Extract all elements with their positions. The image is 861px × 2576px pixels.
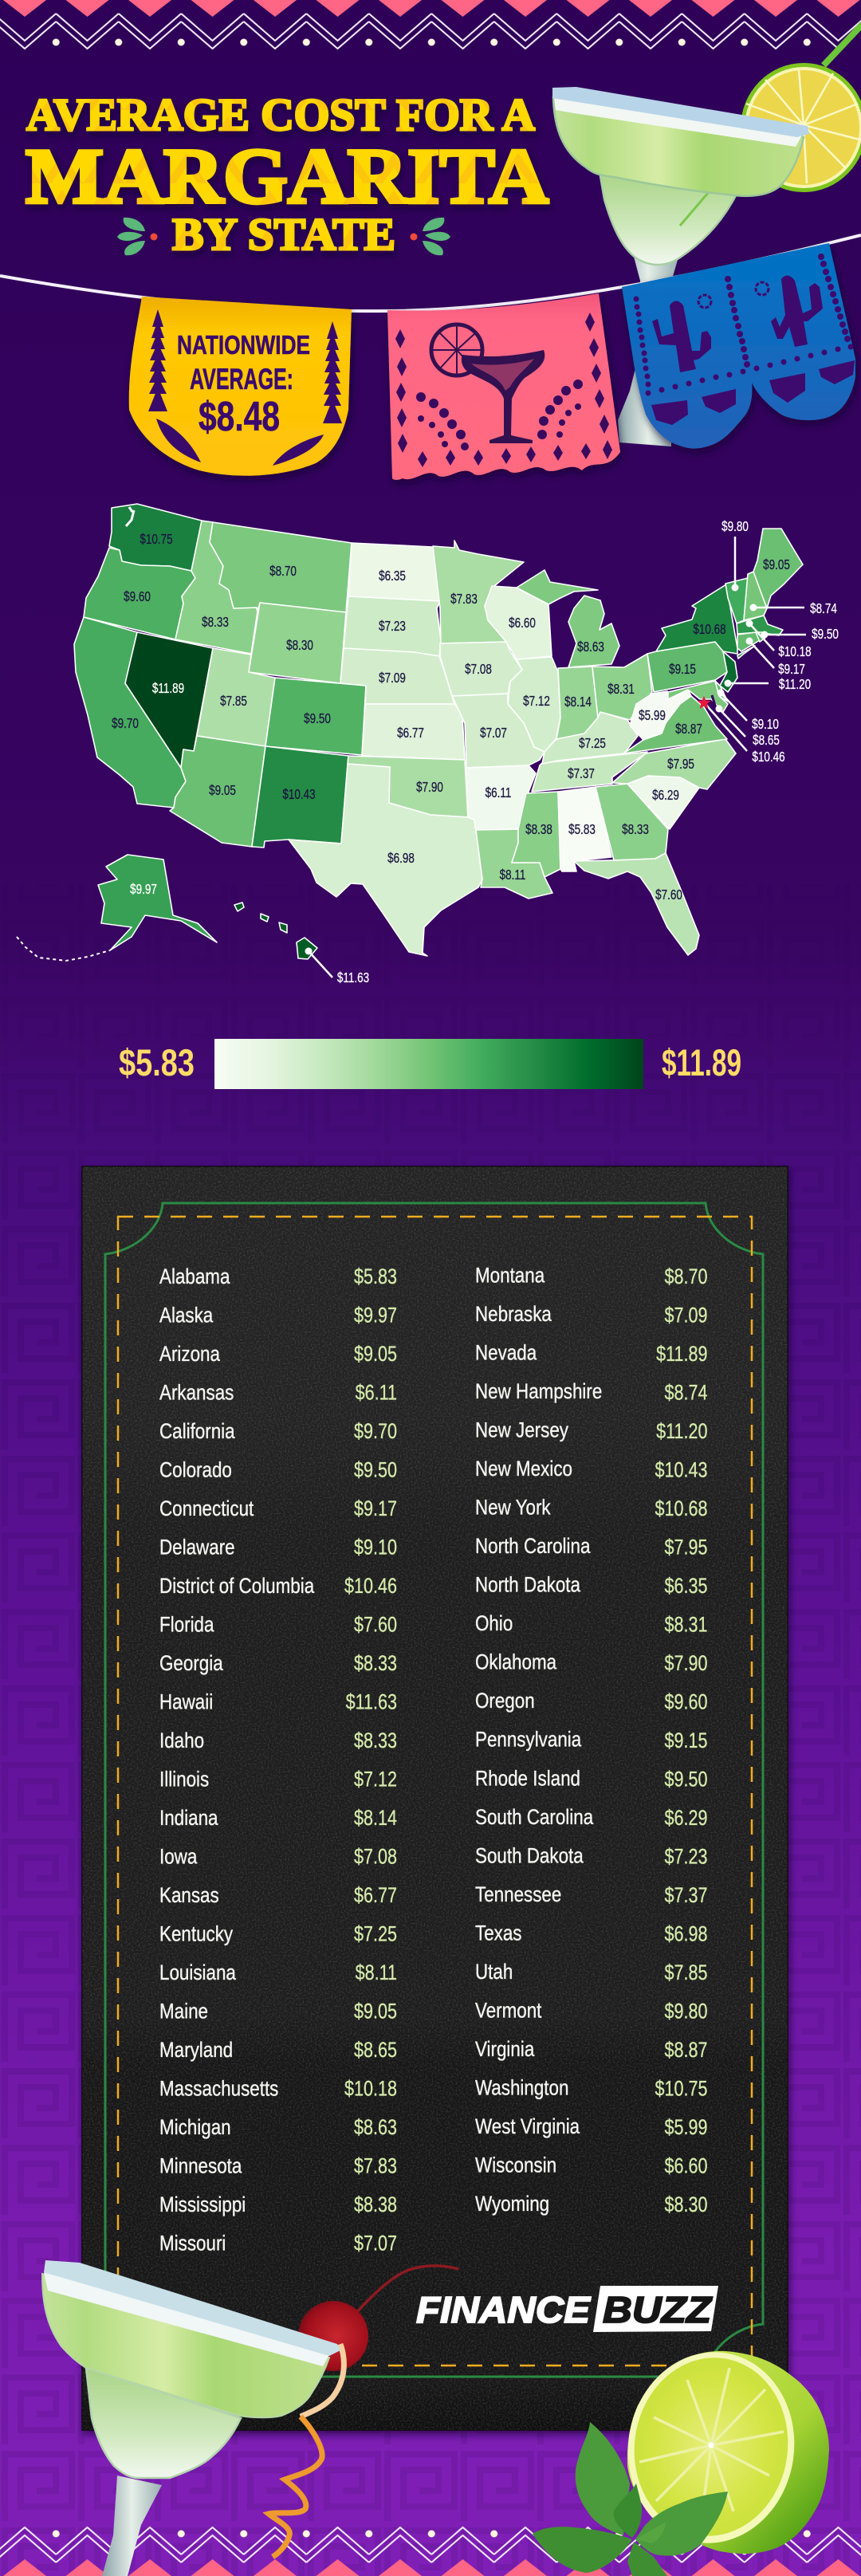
left column state names: District of Columbia — [159, 1575, 314, 1599]
North Dakota — [348, 543, 440, 601]
green frame — [105, 1203, 763, 2377]
map value labels: $8.31 — [607, 682, 635, 698]
map value labels: $7.90 — [416, 780, 443, 796]
legend gradient bar — [214, 1039, 643, 1089]
map value labels: $7.08 — [465, 662, 492, 678]
map value labels: $9.97 — [130, 882, 157, 898]
Minnesota — [433, 541, 524, 643]
map value labels: $8.38 — [525, 822, 552, 838]
map value labels: $9.15 — [669, 662, 696, 678]
right column prices: $11.89 — [656, 1343, 708, 1367]
right column state names: Oregon — [475, 1689, 535, 1713]
Alaska — [98, 855, 217, 950]
left column prices: $7.83 — [354, 2154, 397, 2178]
icon: cherry — [298, 2266, 458, 2371]
left column state names: Iowa — [159, 1846, 197, 1869]
Kansas — [362, 704, 465, 760]
top border pattern — [0, 0, 861, 56]
Illinois — [508, 657, 560, 752]
left column state names: Kentucky — [159, 1923, 234, 1946]
map value labels: $8.14 — [564, 694, 592, 710]
flag dots and diamonds — [395, 313, 612, 467]
West Virginia — [630, 690, 691, 740]
map value labels: $8.33 — [202, 615, 229, 631]
right column prices: $8.31 — [664, 1613, 708, 1637]
right column state names: Oklahoma — [475, 1651, 556, 1674]
bunting string — [0, 235, 861, 311]
Long Island — [737, 646, 755, 659]
map value labels: $9.50 — [304, 711, 331, 727]
bottom border pattern — [0, 2520, 861, 2576]
Massachusetts — [737, 615, 783, 635]
right column prices: $6.29 — [664, 1807, 708, 1831]
panel: state price table — [82, 1166, 788, 2430]
right column state names: Washington — [475, 2077, 568, 2100]
map value labels: $9.17 — [778, 662, 805, 678]
Missouri — [452, 694, 545, 768]
right column state names: Texas — [475, 1921, 522, 1945]
left column prices: $6.77 — [354, 1884, 397, 1908]
Vermont — [725, 578, 748, 623]
states — [74, 504, 803, 959]
map value labels: $9.80 — [721, 519, 749, 535]
left column state names: Michigan — [159, 2116, 231, 2140]
left column prices — [344, 1265, 397, 2255]
left column prices: $8.11 — [356, 1961, 397, 1985]
left column state names: Indiana — [159, 1807, 218, 1831]
left column prices: $8.14 — [354, 1807, 397, 1831]
icon: lime half — [615, 2342, 829, 2554]
right column state names: Nevada — [475, 1342, 537, 1365]
left column prices: $7.08 — [354, 1845, 397, 1869]
North Carolina — [612, 739, 736, 789]
right column prices: $6.60 — [664, 2154, 708, 2178]
map value labels: $8.33 — [622, 822, 649, 838]
right column prices: $8.74 — [664, 1381, 708, 1405]
map value labels: $6.35 — [379, 568, 406, 584]
left column state names: Georgia — [159, 1652, 223, 1676]
map value labels: $8.11 — [500, 867, 526, 883]
icon: margarita glass with lime — [552, 24, 861, 446]
left column state names: Maryland — [159, 2039, 233, 2063]
left column prices: $6.11 — [356, 1381, 397, 1405]
chalkboard texture — [82, 1166, 788, 2430]
left column prices: $5.83 — [354, 1265, 397, 1289]
left column prices: $9.97 — [354, 1304, 397, 1327]
Colorado — [265, 678, 366, 755]
left column state names: Illinois — [159, 1768, 209, 1791]
Georgia — [596, 784, 668, 860]
map value labels: $7.83 — [450, 592, 478, 608]
map value labels: $7.85 — [220, 694, 247, 710]
Connecticut — [737, 632, 760, 651]
FinanceBuzz logo: FINANCE — [416, 2289, 591, 2330]
right column state names: Utah — [475, 1961, 513, 1984]
flag text: AVERAGE: — [190, 363, 293, 395]
right column state names: New York — [475, 1496, 551, 1520]
map value labels: $7.60 — [655, 887, 682, 903]
right column prices: $7.37 — [664, 1884, 708, 1908]
US choropleth map — [17, 504, 839, 986]
map value labels: $7.23 — [379, 619, 406, 635]
right column prices: $7.95 — [664, 1536, 708, 1559]
map value labels: $9.70 — [112, 716, 139, 732]
right column prices: $9.15 — [664, 1729, 708, 1753]
map value labels: $8.65 — [753, 733, 780, 749]
right column prices: $10.75 — [655, 2077, 708, 2101]
map value labels: $7.25 — [579, 736, 606, 752]
FinanceBuzz logo — [416, 2286, 718, 2332]
map value labels: $9.60 — [124, 589, 151, 605]
New Jersey — [720, 651, 737, 692]
right column state names: New Jersey — [475, 1419, 569, 1442]
left column prices: $9.70 — [354, 1420, 397, 1444]
right column state names: Pennsylvania — [475, 1728, 581, 1752]
map value labels: $7.09 — [379, 671, 406, 686]
right column state names: Tennessee — [475, 1883, 561, 1906]
right column prices: $10.43 — [655, 1458, 708, 1482]
left column prices: $8.63 — [354, 2116, 397, 2140]
map value labels: $5.83 — [568, 822, 596, 838]
Kentucky — [542, 712, 638, 764]
map value labels: $11.63 — [337, 970, 369, 986]
South Carolina — [627, 776, 699, 829]
map value labels: $7.07 — [480, 726, 507, 741]
right column prices: $8.30 — [664, 2193, 708, 2217]
map value labels: $7.37 — [568, 766, 595, 782]
left column state names: Delaware — [159, 1536, 235, 1559]
icon: peel ribbon upper — [301, 2344, 344, 2417]
icon: right floral ornament — [410, 218, 450, 255]
right column prices — [655, 1265, 708, 2217]
left column prices: $11.63 — [346, 1690, 397, 1714]
Montana — [210, 522, 352, 612]
right column prices: $9.50 — [664, 1768, 708, 1791]
map value labels: $10.75 — [140, 532, 173, 548]
left column prices: $8.65 — [354, 2039, 397, 2063]
map value labels: $6.11 — [486, 785, 512, 801]
map value labels: $6.77 — [397, 726, 424, 741]
right column state names: Montana — [475, 1264, 545, 1288]
map value labels: $11.20 — [779, 677, 811, 693]
Utah — [197, 648, 275, 746]
Nevada — [125, 632, 213, 768]
flag: cactus — [622, 243, 855, 449]
right column prices: $8.70 — [664, 1265, 708, 1289]
map value labels: $8.74 — [810, 601, 837, 617]
left column state names: Louisiana — [159, 1961, 236, 1985]
left column state names: Kansas — [159, 1884, 219, 1908]
left column state names: Minnesota — [159, 2155, 242, 2178]
Pennsylvania — [647, 642, 727, 692]
perforated dots — [633, 254, 853, 395]
map value labels: $7.95 — [667, 757, 694, 773]
dashed frame — [118, 1217, 752, 2366]
left column state names: Missouri — [159, 2232, 226, 2255]
left column state names: Massachusetts — [159, 2078, 278, 2101]
Rhode Island — [756, 632, 765, 642]
lime wheel icon — [431, 324, 482, 376]
map value labels: $9.05 — [209, 783, 236, 799]
Maryland — [668, 681, 728, 712]
left column state names: Alabama — [159, 1265, 230, 1289]
map value labels: $10.68 — [693, 622, 726, 638]
Chesapeake Bay — [712, 695, 721, 718]
left column prices: $7.60 — [354, 1613, 397, 1637]
left column prices: $10.18 — [344, 2077, 397, 2101]
icon: mint leaves — [533, 2422, 728, 2576]
left column prices: $9.05 — [354, 1343, 397, 1367]
left column prices: $7.07 — [354, 2232, 397, 2255]
Oregon — [84, 548, 195, 639]
right column state names: Nebraska — [475, 1303, 552, 1327]
Hawaii — [234, 903, 317, 959]
icon: left floral ornament — [117, 218, 158, 255]
New Hampshire — [744, 572, 767, 620]
right column state names: Ohio — [475, 1612, 513, 1636]
map value labels: $6.98 — [387, 851, 415, 867]
right column state names: Wisconsin — [475, 2154, 556, 2177]
left column state names: Maine — [159, 2000, 208, 2023]
title line 3: BY STATE — [172, 210, 395, 260]
map value labels: $5.99 — [639, 708, 666, 724]
left column state names: Alaska — [159, 1304, 213, 1327]
map value labels: $8.70 — [269, 564, 297, 580]
Arizona — [170, 736, 265, 847]
Iowa — [440, 642, 522, 696]
Michigan — [517, 570, 619, 667]
map value labels — [112, 519, 839, 986]
right column prices: $5.99 — [664, 2116, 708, 2140]
map value labels: $11.89 — [152, 681, 184, 697]
New Mexico — [252, 746, 348, 848]
flag text: $8.48 — [199, 394, 280, 440]
map value labels: $9.10 — [752, 717, 779, 733]
left column state names: Connecticut — [159, 1497, 254, 1521]
map value labels: $10.43 — [282, 787, 316, 803]
Indiana — [556, 667, 598, 739]
map value labels: $8.87 — [675, 722, 702, 737]
right column prices: $6.35 — [664, 1575, 708, 1599]
margarita glass icon — [462, 350, 545, 443]
map value labels: $9.05 — [763, 557, 790, 573]
left column state names: Idaho — [159, 1729, 204, 1753]
Maine — [753, 529, 803, 608]
right column prices: $10.68 — [655, 1497, 708, 1521]
flag leaf cut-outs — [156, 419, 324, 466]
left column prices: $9.50 — [354, 1458, 397, 1482]
background key pattern — [2, 1532, 861, 2576]
icon: margarita glass bottom left — [42, 2260, 340, 2576]
right column prices: $9.80 — [664, 2000, 708, 2023]
Ohio — [592, 654, 652, 720]
title line 1: AVERAGE COST FOR A — [26, 90, 535, 140]
left column state names: Colorado — [159, 1459, 232, 1482]
map value labels: $8.30 — [286, 638, 313, 654]
title line 2: MARGARITA — [26, 133, 548, 220]
left column prices: $10.46 — [344, 1575, 397, 1599]
map value labels: $10.46 — [752, 749, 785, 765]
right column prices: $7.09 — [664, 1304, 708, 1327]
left column state names — [159, 1265, 314, 2255]
right column prices: $7.85 — [664, 1961, 708, 1985]
South Dakota — [344, 596, 441, 656]
Idaho — [175, 521, 258, 654]
left column prices: $8.38 — [354, 2193, 397, 2217]
right column state names: Vermont — [475, 2000, 542, 2023]
right column state names: Rhode Island — [475, 1767, 580, 1791]
left column state names: Arizona — [159, 1343, 220, 1367]
New York — [656, 584, 737, 654]
Alabama — [558, 787, 611, 871]
left column state names: Hawaii — [159, 1691, 213, 1714]
right column state names: Wyoming — [475, 2193, 549, 2216]
right column state names: West Virginia — [475, 2115, 580, 2138]
title — [26, 90, 548, 260]
right column state names: South Dakota — [475, 1844, 584, 1868]
flag trees decoration — [148, 309, 342, 423]
Wisconsin — [485, 586, 552, 659]
left column prices: $7.12 — [354, 1768, 397, 1791]
right column state names: North Carolina — [475, 1535, 591, 1559]
icon: peel ribbon lower — [269, 2417, 322, 2557]
Nebraska — [340, 648, 454, 704]
right column state names: New Mexico — [475, 1457, 572, 1481]
left column prices: $9.10 — [354, 1536, 397, 1559]
flag text: NATIONWIDE — [177, 330, 310, 360]
Texas — [289, 764, 482, 956]
right column state names: North Dakota — [475, 1574, 580, 1597]
Florida — [574, 853, 699, 955]
Mississippi — [512, 792, 560, 877]
Delaware — [715, 681, 728, 702]
cactus cut-out 2 — [771, 275, 823, 347]
callout leader lines — [305, 537, 806, 977]
Oklahoma — [348, 756, 468, 817]
map value labels: $7.12 — [523, 694, 550, 710]
Tennessee — [532, 752, 647, 792]
left column state names: Florida — [159, 1614, 214, 1637]
Puget Sound coast detail — [126, 507, 134, 526]
map value labels: $9.50 — [812, 627, 839, 643]
flag text — [177, 330, 310, 440]
right column prices: $8.87 — [664, 2039, 708, 2063]
left column prices: $9.17 — [354, 1497, 397, 1521]
right column prices: $11.20 — [656, 1420, 708, 1444]
Arkansas — [466, 765, 536, 830]
flag: nationwide average — [129, 297, 352, 476]
legend maximum: $11.89 — [662, 1041, 741, 1083]
left column state names: Arkansas — [159, 1382, 234, 1405]
left column state names: California — [159, 1420, 235, 1444]
FinanceBuzz logo: BUZZ — [603, 2289, 713, 2330]
right column prices: $6.98 — [664, 1922, 708, 1946]
map value labels: $10.18 — [778, 644, 812, 660]
cactus cut-out 1 — [652, 301, 711, 372]
right column prices: $7.90 — [664, 1652, 708, 1676]
right column state names — [475, 1264, 602, 2216]
scalloped cut-outs — [651, 360, 855, 425]
Washington — [109, 504, 202, 571]
left column prices: $7.25 — [354, 1922, 397, 1946]
left column prices: $8.33 — [354, 1729, 397, 1753]
right column state names: South Carolina — [475, 1806, 593, 1829]
right column prices: $9.60 — [664, 1690, 708, 1714]
map value labels: $6.29 — [652, 788, 679, 804]
Wyoming — [249, 603, 346, 683]
Virginia — [623, 696, 727, 753]
legend — [119, 1039, 741, 1089]
legend minimum: $5.83 — [119, 1041, 195, 1083]
right column prices: $7.23 — [664, 1845, 708, 1869]
right column state names: New Hampshire — [475, 1380, 602, 1404]
left column prices: $8.33 — [354, 1652, 397, 1676]
left column state names: Mississippi — [159, 2193, 246, 2217]
map value labels: $8.63 — [577, 639, 604, 655]
left column prices: $9.05 — [354, 2000, 397, 2023]
Aleutian islands — [17, 937, 110, 961]
California — [74, 617, 186, 808]
right column state names: Virginia — [475, 2038, 534, 2061]
flag: margarita icon — [387, 293, 620, 480]
icon: DC star — [698, 696, 710, 709]
map value labels: $6.60 — [509, 615, 536, 631]
Louisiana — [476, 829, 552, 899]
